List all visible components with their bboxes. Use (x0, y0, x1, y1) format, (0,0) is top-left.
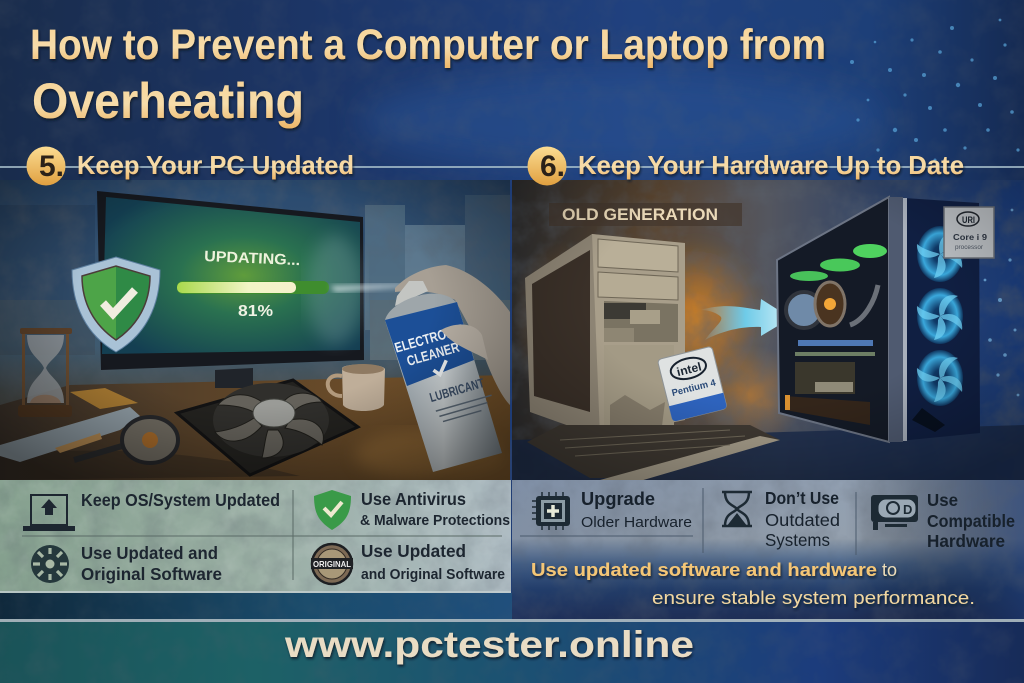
icon: original stamp: ORIGINAL (313, 559, 351, 569)
intel pentium badge (657, 346, 727, 422)
takeaway text (531, 560, 975, 608)
icon: graphics card (871, 495, 918, 530)
tip: compatible hardware (871, 490, 1015, 551)
icon: hourglass (18, 328, 72, 417)
tip: upgrade older hardware: Older Hardware (581, 514, 692, 531)
upgrade arrow (700, 299, 791, 340)
new processor badge: Core i 9 (953, 232, 987, 242)
title: Overheating (32, 73, 304, 129)
tip: antivirus: Use Antivirus (361, 489, 466, 509)
heading: section 6: 6. (540, 150, 565, 183)
tip: updated software (31, 543, 222, 584)
internal components (785, 244, 887, 425)
icon: original stamp (311, 544, 353, 584)
floor (512, 425, 1024, 480)
takeaway text: Use updated software and hardware (531, 560, 877, 580)
icon: laptop with up arrow (23, 495, 75, 531)
magnifying glass (74, 417, 178, 463)
dirty computer fan (177, 380, 358, 475)
gloved hand (395, 265, 510, 405)
notebook (70, 388, 138, 409)
update progress text: UPDATING... (204, 248, 300, 269)
tip: compatible hardware: Hardware (927, 531, 1005, 551)
can label text: LUBRICANT (428, 375, 486, 405)
tip: compatible hardware: Compatible (927, 511, 1015, 531)
spray mist (330, 284, 402, 292)
panel: right tips strip (512, 480, 1024, 620)
heading: section 5 (26, 146, 354, 186)
old keyboard (527, 425, 780, 481)
title: How to Prevent a Computer or Laptop from (30, 21, 826, 69)
tip: antivirus (314, 489, 510, 530)
tip: original software: Use Updated (361, 541, 466, 561)
tip: outdated systems: Don’t Use (765, 488, 839, 508)
icon: aperture (31, 545, 69, 583)
can label text: CLEANER (405, 339, 461, 369)
can label text (393, 318, 495, 429)
percent: 81% (238, 303, 273, 320)
thumb over can (441, 325, 488, 360)
tip: keep OS updated: Keep OS/System Updated (81, 490, 280, 510)
old generation label: OLD GENERATION (562, 205, 718, 224)
intel pentium badge: intel (675, 359, 703, 379)
monitor (97, 191, 364, 388)
heading: section 6 (528, 146, 964, 186)
icon: green shield (72, 257, 160, 352)
icon: CPU chip (532, 492, 574, 530)
tip: outdated systems: Outdated (765, 510, 840, 530)
can label text: ELECTRONIC (393, 320, 466, 356)
section divider lines (0, 166, 1024, 168)
website url: www.pctester.online (284, 624, 694, 665)
spray can (385, 281, 502, 472)
desk surface (0, 375, 510, 480)
panel: left tips strip (0, 480, 511, 593)
tip: updated software: Original Software (81, 564, 222, 584)
tip: original software (311, 541, 505, 584)
keyboard and tools (0, 407, 140, 462)
icon: shield check (314, 490, 351, 530)
title (30, 21, 826, 129)
footer band (0, 619, 1024, 665)
heading: section 5: 5. (39, 150, 64, 183)
heading: section 5: Keep Your PC Updated (77, 150, 354, 180)
panel: left scene, keep your PC updated (0, 180, 510, 480)
tip: updated software: Use Updated and (81, 543, 218, 563)
takeaway text: ensure stable system performance. (652, 588, 975, 608)
heading: section 6: Keep Your Hardware Up to Date (578, 150, 964, 180)
new processor badge: processor (955, 245, 983, 251)
takeaway text: to (882, 560, 897, 580)
tip: compatible hardware: Use (927, 490, 958, 510)
intel pentium badge: Pentium 4 (671, 377, 718, 399)
old dusty PC tower (525, 234, 685, 437)
new gaming PC tower (777, 197, 980, 442)
icon: hourglass outline (722, 492, 752, 526)
progress bar (177, 281, 329, 294)
city backdrop blocks (0, 195, 510, 360)
tip: upgrade older hardware (532, 489, 692, 531)
tip: outdated systems: Systems (765, 530, 830, 550)
old generation label (549, 203, 742, 226)
tip: keep OS updated (23, 490, 280, 531)
panel: right scene, keep your hardware up to date (510, 180, 1024, 481)
icon: graphics card: D (903, 502, 912, 517)
blue RGB fans (917, 226, 963, 406)
tip: original software: and Original Software (361, 567, 505, 583)
coffee mug (328, 364, 385, 411)
new processor badge: URI (962, 215, 975, 225)
tip: outdated systems (722, 488, 840, 550)
new processor badge (944, 207, 994, 258)
tip: antivirus: & Malware Protections (360, 512, 510, 529)
tip: upgrade older hardware: Upgrade (581, 489, 655, 509)
